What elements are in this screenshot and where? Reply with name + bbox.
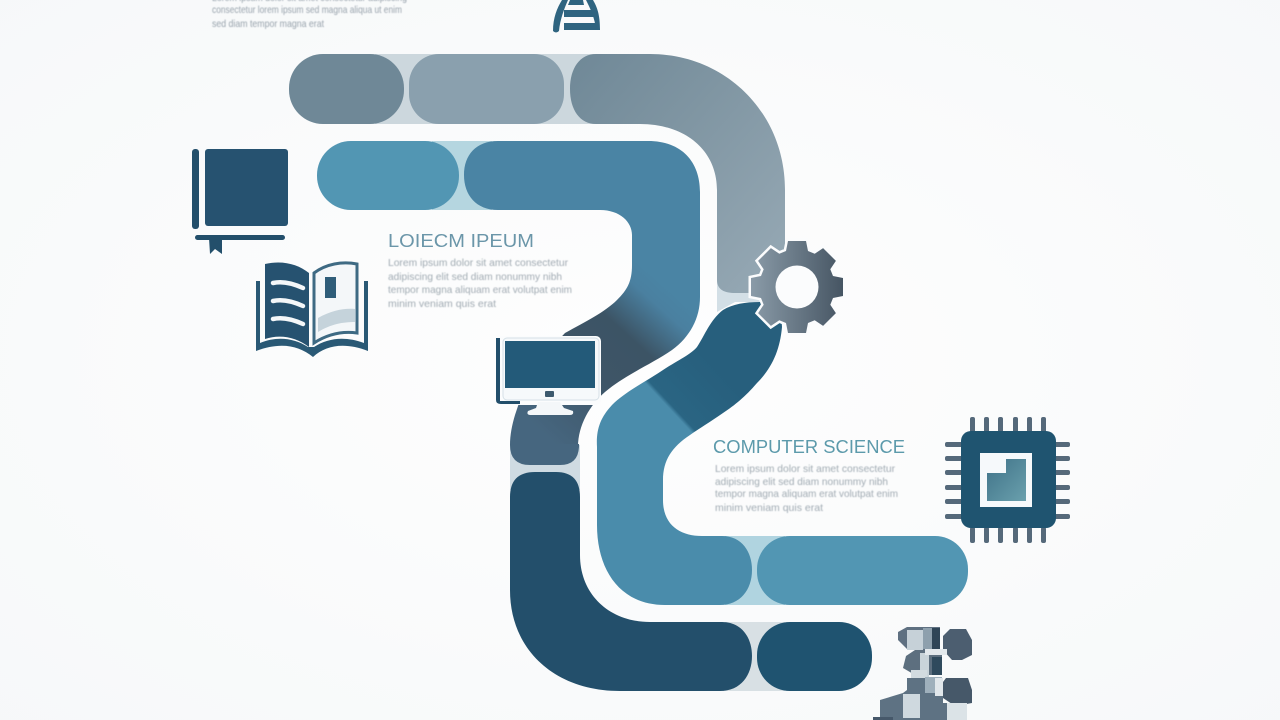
base of blue segment over strip: [510, 444, 579, 465]
connector strip between dark segments: [510, 445, 580, 490]
icon: open book: [256, 262, 368, 357]
light blue end pill: [757, 536, 968, 605]
gray pill 2: [409, 54, 564, 124]
text block: computer science body: adipiscing elit sed diam nonummy nibh: [715, 476, 888, 488]
text block: lorem ipsum body: [388, 257, 572, 310]
chip body: [961, 431, 1056, 528]
chip core stepped graphic: [987, 459, 1026, 501]
icon: pixelated gear cluster: [873, 627, 972, 720]
gray pill 1: [289, 54, 404, 124]
blue pill: [317, 141, 459, 210]
text block: computer science body: minim veniam quis erat: [715, 502, 823, 514]
icon: closed book: [192, 149, 288, 254]
heading: computer science: COMPUTER SCIENCE: [713, 437, 905, 457]
connector strip under gray segment: [717, 272, 760, 312]
chip core: [980, 453, 1032, 507]
connector strip dark pill: [725, 622, 785, 691]
icon: monitor: [496, 336, 601, 415]
ribbon: blue track: [317, 141, 700, 465]
gray curved segment: [570, 54, 785, 293]
dark lower curved segment: [510, 472, 752, 691]
icon: microchip: [945, 417, 1070, 543]
text block: lorem ipsum body: minim veniam quis erat: [388, 298, 496, 310]
chip pins: [945, 417, 1070, 543]
top text fragment: [212, 0, 407, 30]
text block: computer science body: Lorem ipsum dolor sit amet consectetur: [715, 463, 895, 475]
icon: gear: [751, 241, 843, 333]
text block: lorem ipsum body: adipiscing elit sed diam nonummy nibh: [388, 271, 562, 283]
connector strip blue: [432, 141, 492, 210]
top text fragment: sed diam tempor magna erat: [212, 18, 324, 30]
text block: lorem ipsum body: Lorem ipsum dolor sit amet consectetur: [388, 257, 568, 269]
text block: computer science body: [715, 463, 898, 514]
heading: lorem ipsum: LOIECM IPEUM: [388, 231, 534, 251]
icon: DNA helix: [553, 0, 600, 32]
blue upper segment: [464, 141, 700, 236]
connector strip gray: [375, 54, 595, 124]
ribbon: gray track: [289, 54, 785, 293]
teal two-tone curved segment: [597, 302, 782, 605]
top text fragment: consectetur lorem ipsum sed magna aliqua ut enim: [212, 4, 402, 16]
text block: computer science body: tempor magna aliquam erat volutpat enim: [715, 488, 898, 500]
dark end pill: [757, 622, 872, 691]
connector strip light pill: [725, 536, 785, 605]
text block: lorem ipsum body: tempor magna aliquam erat volutpat enim: [388, 284, 572, 296]
blue lower S-curve segment: [510, 235, 700, 465]
